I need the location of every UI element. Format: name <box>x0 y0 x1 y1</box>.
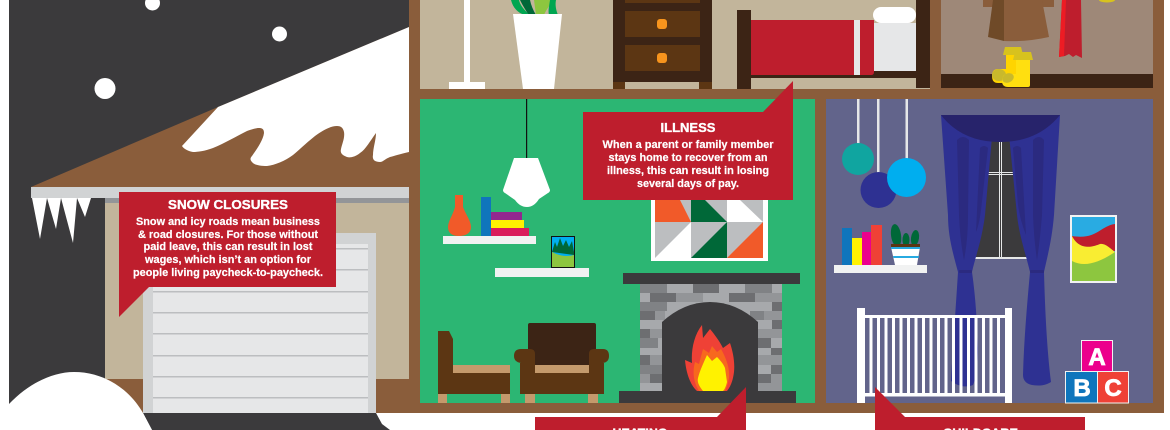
snow closures text: Snow and icy roads mean business <box>136 216 320 228</box>
panel: bedroom <box>420 0 930 89</box>
callout: childcare <box>875 387 1085 430</box>
heading: illness: ILLNESS <box>660 120 716 135</box>
callout: heating <box>535 387 746 430</box>
fire <box>685 325 734 391</box>
alphabet blocks <box>1066 340 1128 403</box>
icicles <box>32 198 91 243</box>
window <box>966 140 1034 259</box>
rain boots <box>992 47 1033 87</box>
pendant lamp <box>503 99 550 207</box>
alphabet blocks: C <box>1104 375 1122 402</box>
illness text: several days of pay. <box>637 178 739 190</box>
snow closures text: paid leave, this can result in lost <box>144 241 313 253</box>
driveway <box>143 413 390 430</box>
crib <box>857 308 1012 403</box>
firebox <box>662 302 758 391</box>
illness text: stays home to recover from an <box>608 152 768 164</box>
snow closures text: wages, which isn’t an option for <box>144 254 312 266</box>
shelf with books and plant <box>834 223 927 273</box>
coat <box>983 0 1054 41</box>
illness text <box>602 139 774 190</box>
scarf <box>1059 0 1082 58</box>
callout: snow closures <box>119 192 336 317</box>
heading: snow closures: SNOW CLOSURES <box>168 197 288 212</box>
floor lamp <box>449 0 485 89</box>
alphabet blocks: A <box>1088 344 1106 371</box>
stone bricks <box>640 284 782 391</box>
snow closures text <box>133 216 323 279</box>
house frame <box>409 0 1164 413</box>
garage door <box>143 233 376 413</box>
left margin <box>0 0 9 404</box>
wall art <box>1070 215 1117 283</box>
alphabet blocks: B <box>1073 375 1091 402</box>
snow bank <box>0 372 152 430</box>
hearth <box>619 391 796 403</box>
callout: illness <box>583 81 793 200</box>
mantel <box>623 273 800 284</box>
yellow hat edge <box>1099 0 1115 2</box>
geometric painting <box>651 190 768 261</box>
panel: living room <box>420 81 815 403</box>
roof <box>31 27 409 187</box>
panel: nursery <box>826 99 1153 403</box>
wall <box>105 203 409 379</box>
snow closures text: people living paycheck-to-paycheck. <box>133 267 323 279</box>
fireplace <box>619 273 800 403</box>
soffit <box>31 187 409 203</box>
dresser <box>613 0 712 89</box>
side chair <box>438 331 510 403</box>
wall base <box>105 379 409 413</box>
roof snow <box>182 27 409 166</box>
illness text: When a parent or family member <box>602 139 774 151</box>
illness text: illness, this can result in losing <box>607 165 769 177</box>
plant <box>511 0 558 15</box>
vase <box>513 14 562 89</box>
valance <box>941 115 1060 142</box>
lower shelf with picture <box>495 236 589 277</box>
panel: garage exterior <box>0 0 409 430</box>
snow closures text: & road closures. For those without <box>138 229 318 241</box>
panel: closet <box>941 0 1153 88</box>
night sky background <box>9 0 409 413</box>
bed <box>737 0 930 89</box>
upper shelf with vase and books <box>443 195 536 244</box>
armchair <box>514 323 609 403</box>
curtains <box>941 115 1060 386</box>
mobile <box>842 99 926 208</box>
snowflakes <box>94 0 287 99</box>
